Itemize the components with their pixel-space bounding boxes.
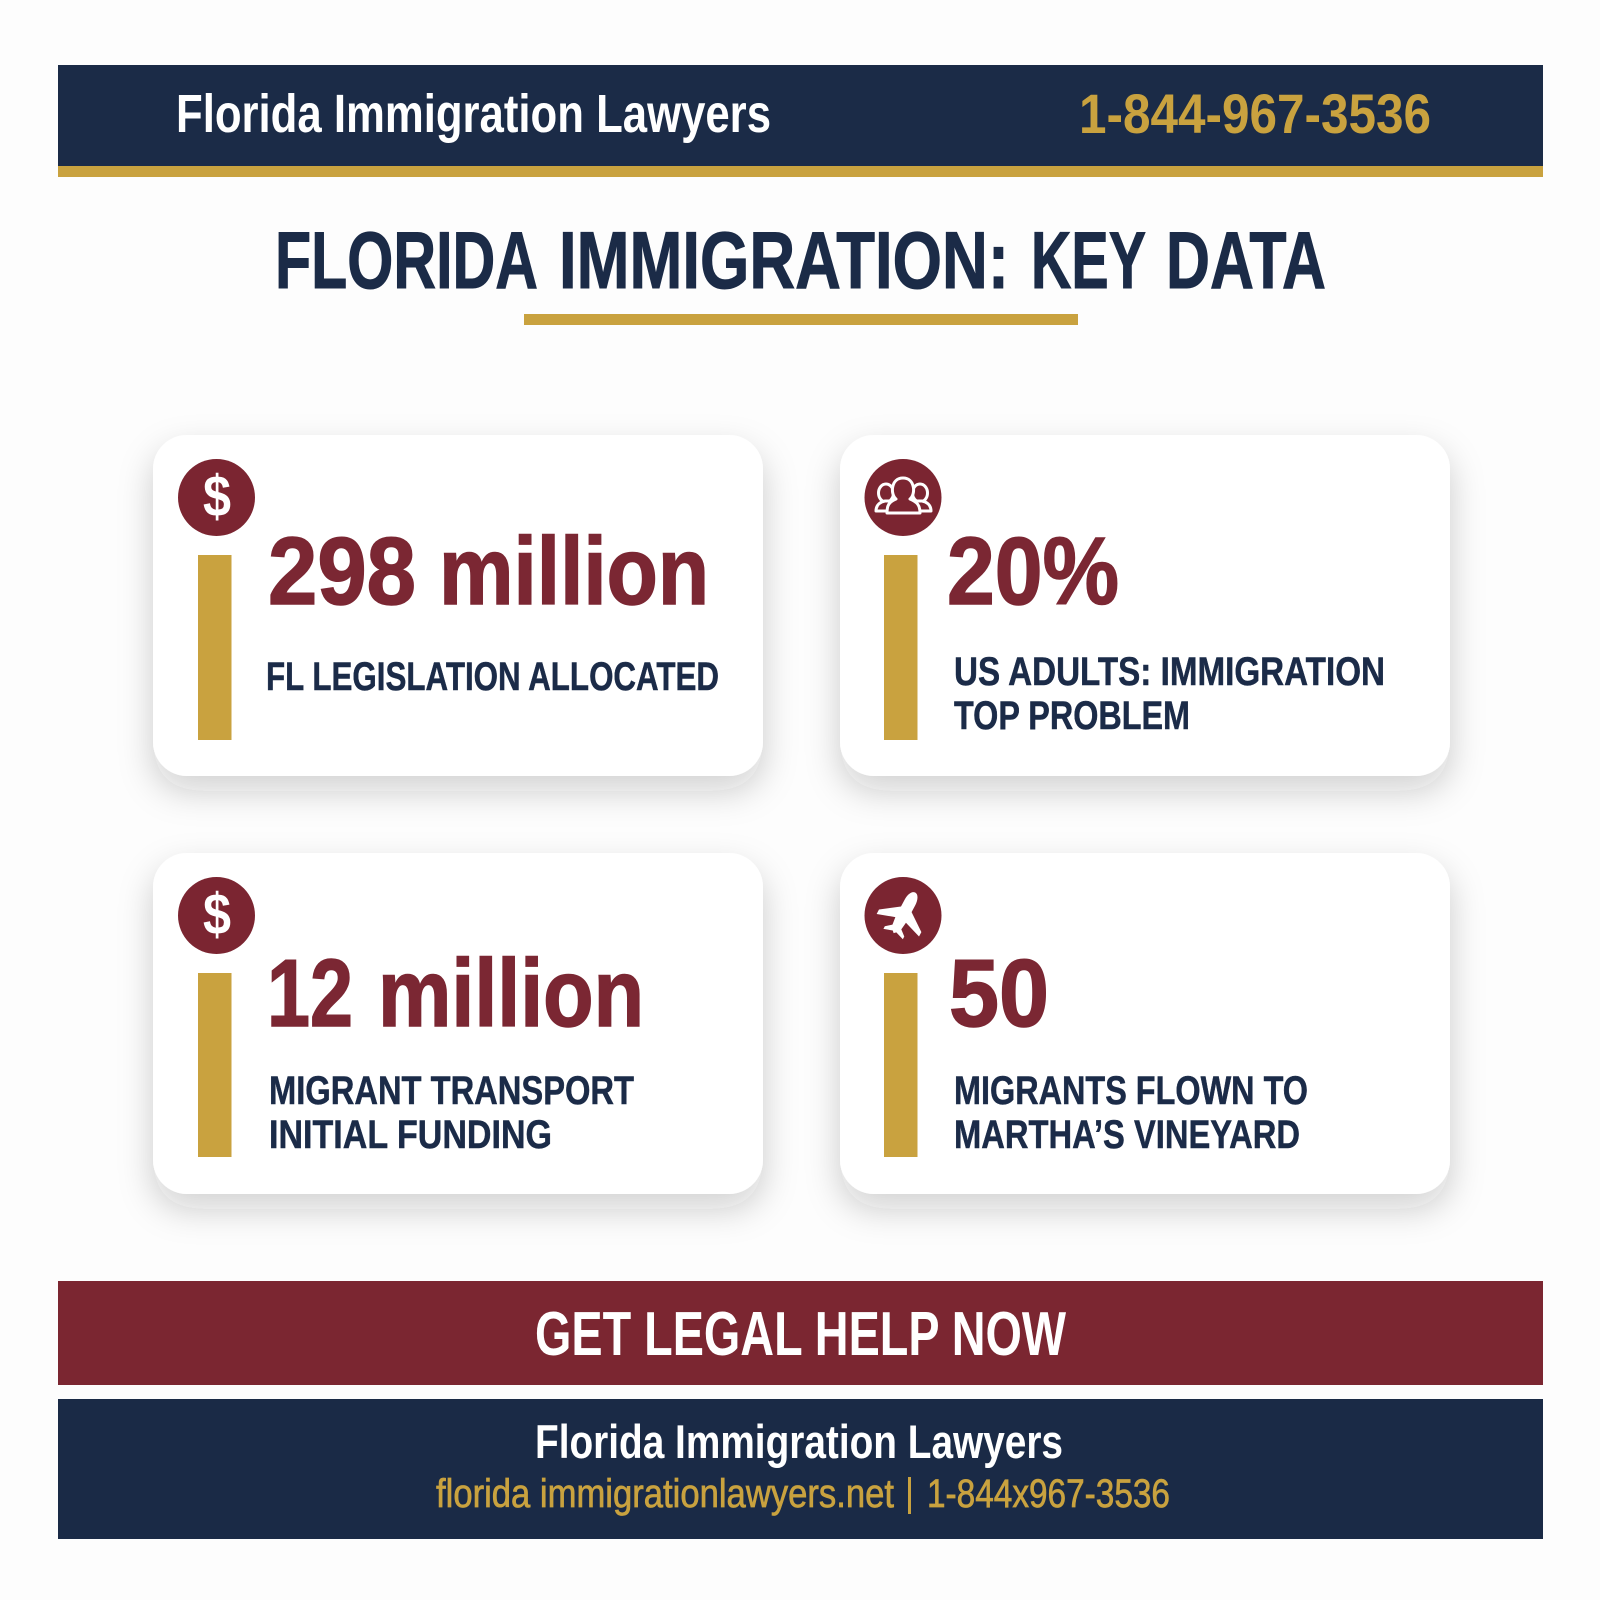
call to action text: GET LEGAL HELP NOW [535, 1300, 1066, 1369]
gold bar [884, 555, 918, 740]
stat value [268, 518, 709, 625]
stat label: US ADULTS: IMMIGRATION [954, 650, 1385, 694]
icon: dollar: $ [203, 882, 231, 947]
panel: 20 percent [840, 435, 1450, 776]
title: DATA [1166, 216, 1326, 306]
footer firm name: Florida Immigration Lawyers [535, 1415, 1063, 1468]
icon: people [864, 459, 942, 536]
call to action banner [58, 1281, 1543, 1385]
gold bar [198, 555, 232, 740]
stat label: MIGRANTS FLOWN TO [954, 1069, 1308, 1113]
title [275, 216, 1326, 306]
stat value: 20% [947, 518, 1119, 625]
footer website: florida immigrationlawyers.net [436, 1472, 894, 1516]
gold bar [198, 973, 232, 1157]
title: IMMIGRATION: [559, 216, 1009, 306]
stat value [267, 940, 644, 1047]
stat value: million [378, 940, 644, 1047]
stat label second line: TOP PROBLEM [954, 694, 1190, 738]
icon: dollar [178, 877, 255, 954]
footer band [58, 1399, 1543, 1539]
stat label: MIGRANT TRANSPORT [269, 1069, 634, 1113]
title: KEY [1031, 216, 1146, 306]
gold bar [884, 973, 918, 1157]
footer phone: 1-844x967-3536 [927, 1472, 1170, 1516]
icon: airplane [864, 877, 942, 954]
stat value: 12 [267, 940, 353, 1047]
panel: 298 million [153, 435, 763, 776]
stat label: FL LEGISLATION ALLOCATED [266, 655, 719, 699]
header phone number: 1-844-967-3536 [1079, 82, 1431, 145]
stat label second line: INITIAL FUNDING [269, 1113, 552, 1157]
footer divider [908, 1477, 911, 1514]
panel: 50 migrants [840, 853, 1450, 1194]
stat value: 50 [949, 940, 1049, 1047]
stat value: 298 [268, 518, 416, 625]
title: FLORIDA [275, 216, 538, 306]
header firm name: Florida Immigration Lawyers [176, 84, 771, 144]
title underline [524, 314, 1078, 325]
header band [58, 65, 1543, 177]
icon: dollar: $ [203, 464, 231, 529]
panel: 12 million [153, 853, 763, 1194]
stat label second line: MARTHA’S VINEYARD [954, 1113, 1300, 1157]
icon: dollar [178, 459, 255, 536]
stat value: million [439, 518, 709, 625]
